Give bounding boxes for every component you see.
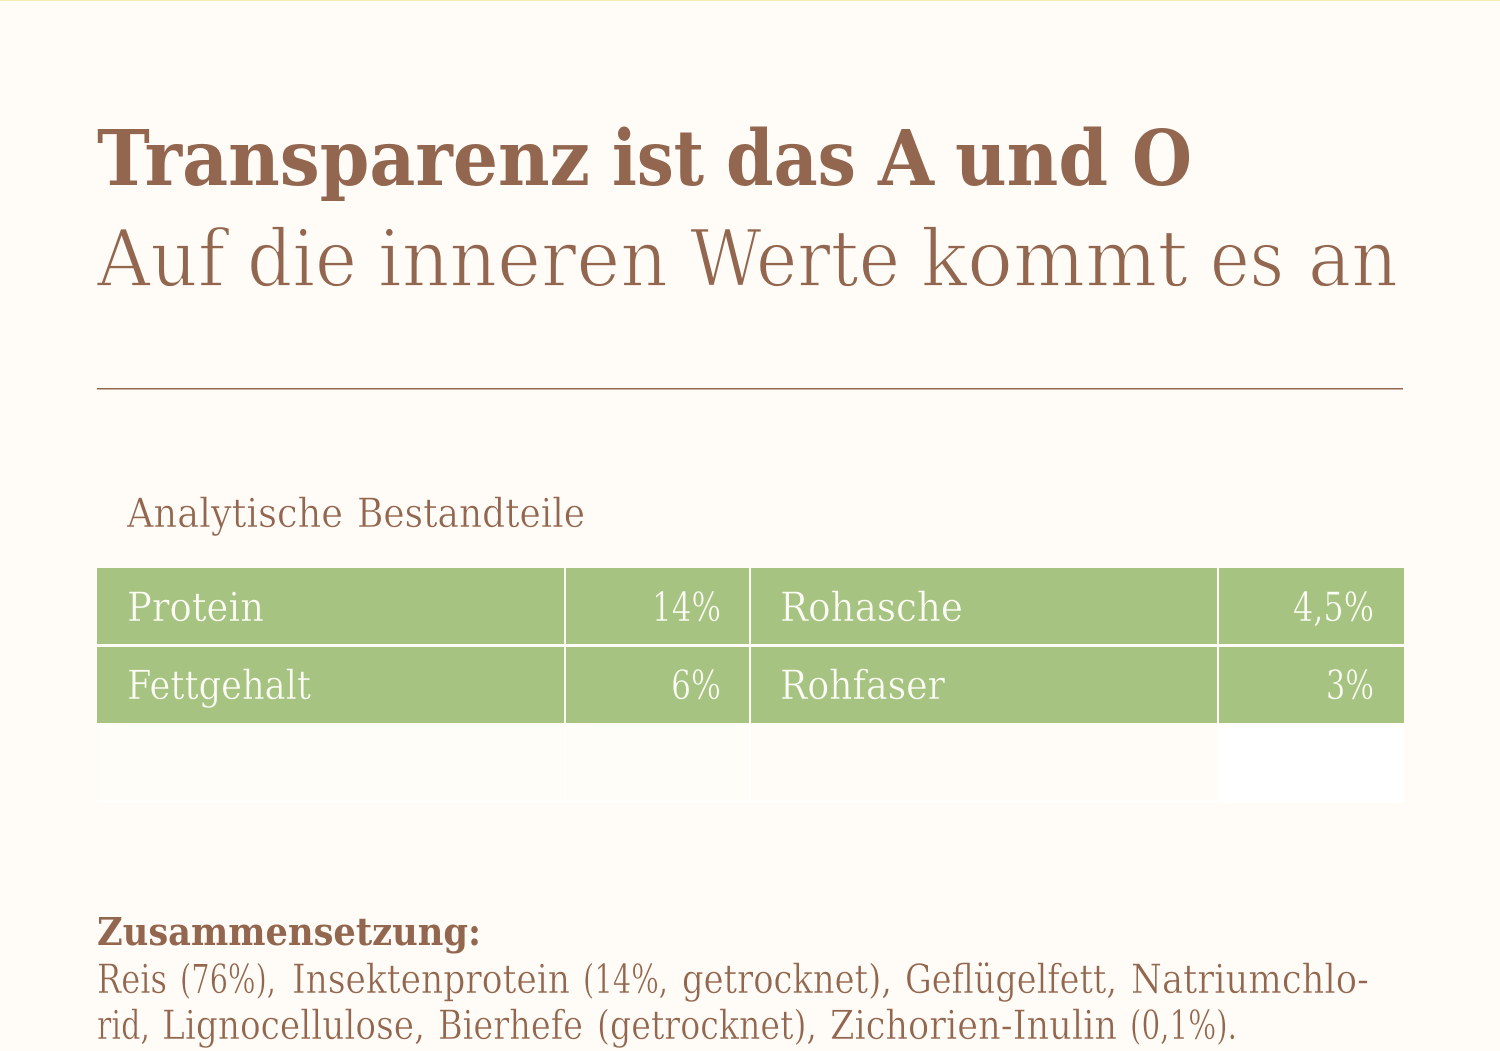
composition line 2: Zichorien-Inulin (830, 1003, 1117, 1049)
table heading (126, 491, 585, 537)
composition line 2: Bierhefe (438, 1003, 583, 1049)
heading: subtitle: Werte (690, 213, 900, 305)
row 2 (97, 647, 1404, 723)
composition line 2: (getrocknet), (597, 1003, 817, 1049)
composition heading: Zusammensetzung: (97, 909, 481, 954)
row 1 (97, 568, 1404, 644)
heading: main title: A (877, 114, 935, 204)
heading: main title: das (726, 114, 856, 204)
row 1: 14% (652, 585, 721, 631)
heading: subtitle: an (1308, 213, 1398, 305)
row 3: empty (97, 725, 1404, 803)
heading: subtitle: die (247, 213, 357, 305)
composition line 1: Insektenprotein (292, 957, 570, 1003)
heading: subtitle: es (1210, 213, 1284, 305)
composition line 2: (0,1%). (1130, 1003, 1237, 1049)
heading: main title: O (1132, 114, 1192, 204)
heading: main title: und (955, 114, 1108, 204)
heading: main title: ist (612, 114, 704, 204)
row 2: Fettgehalt (127, 663, 311, 709)
title (96, 114, 1398, 305)
row 2: 3% (1326, 663, 1374, 709)
table heading: Bestandteile (357, 491, 585, 537)
table heading: Analytische (126, 491, 343, 537)
composition line 1: (14%, (583, 957, 668, 1003)
table: analytical constituents (97, 568, 1404, 803)
heading: subtitle: kommt (921, 213, 1188, 305)
composition line 1: Geflügelfett, (905, 957, 1117, 1003)
composition line 2 (97, 1003, 1237, 1049)
row 1: Protein (127, 585, 264, 631)
composition line 1: getrocknet), (682, 957, 892, 1003)
composition text block (97, 909, 1369, 1049)
row 1: Rohasche (780, 585, 963, 631)
heading: subtitle: Auf (96, 213, 229, 305)
composition line 1: Reis (97, 957, 167, 1003)
heading: main title: Transparenz (97, 114, 590, 204)
row 1: 4,5% (1293, 585, 1374, 631)
row 2: 6% (671, 663, 721, 709)
composition line 1: (76%), (180, 957, 276, 1003)
row 2: Rohfaser (780, 663, 946, 709)
heading: subtitle (96, 213, 1398, 305)
composition line 1: Natriumchlo- (1131, 957, 1369, 1003)
heading: main title (97, 114, 1192, 204)
composition line 2: rid, (97, 1003, 150, 1049)
composition line 2: Lignocellulose, (162, 1003, 425, 1049)
composition line 1 (97, 957, 1369, 1003)
heading: subtitle: inneren (378, 213, 668, 305)
